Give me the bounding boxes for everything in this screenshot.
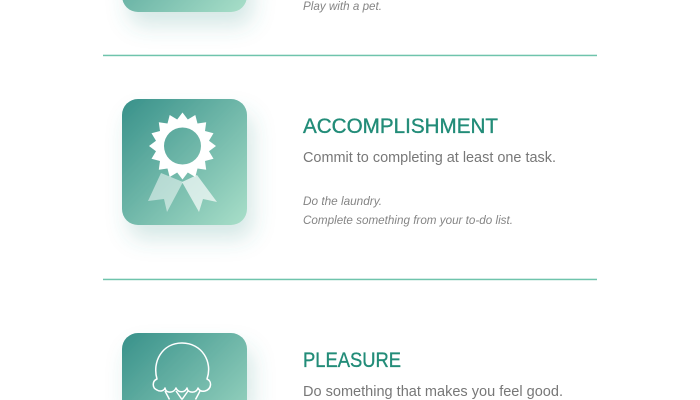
description: pleasure: Do something that makes you feel good. [303, 383, 563, 400]
heading: pleasure: PLEASURE [303, 349, 401, 372]
icon tile: pleasure [122, 333, 247, 400]
example: to-do list: Complete something from your to-do list. [303, 213, 513, 227]
ribbon: left [148, 173, 183, 212]
seal [149, 112, 216, 180]
icon: ice cream [153, 343, 211, 400]
divider: top [103, 55, 597, 56]
panel: top section (partially cropped) [122, 0, 382, 13]
ribbon: right [182, 175, 217, 212]
example: laundry: Do the laundry. [303, 194, 382, 208]
scoop outline [153, 343, 211, 392]
icon tile: cropped [122, 0, 247, 12]
cone lines [165, 391, 200, 400]
icon: award rosette [148, 112, 217, 212]
panel: pleasure [122, 333, 563, 400]
divider: middle [103, 279, 597, 280]
description: accomplishment: Commit to completing at least one task. [303, 149, 556, 166]
panel: accomplishment [122, 99, 556, 227]
heading: accomplishment: ACCOMPLISHMENT [303, 115, 498, 138]
examples: accomplishment [303, 194, 513, 227]
icon tile: accomplishment [122, 99, 247, 225]
